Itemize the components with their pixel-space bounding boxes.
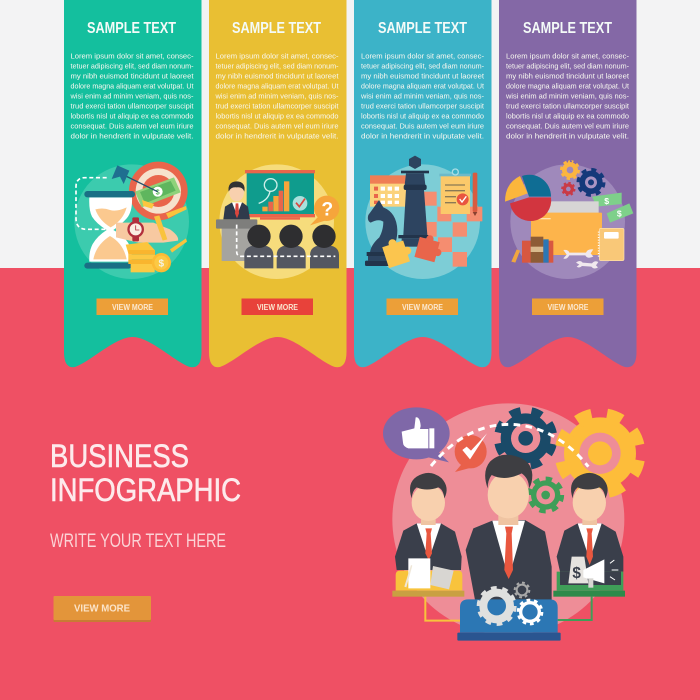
button: view more main: VIEW MORE (74, 604, 130, 614)
text block: dolore magna aliquam erat volutpat. Ut (70, 82, 194, 90)
text block: consequat. Duis autem vel eum iriure (70, 122, 194, 130)
subtitle: WRITE YOUR TEXT HERE (50, 531, 226, 552)
text block: dolor in hendrerit in vulputate velit. (70, 132, 194, 140)
icon: thumbs up bubble (383, 407, 450, 462)
text block: Lorem ipsum dolor sit amet, consec- (361, 52, 484, 60)
text block (70, 52, 194, 140)
text block: dolore magna aliquam erat volutpat. Ut (506, 82, 630, 90)
icon: hourglass, target and coins: $ (156, 187, 160, 196)
text block: tetuer adipiscing elit, sed diam nonum- (361, 62, 484, 70)
icon: chess pieces, calendar and puzzle (365, 156, 482, 279)
text block: wisi enim ad minim veniam, quis nos- (215, 92, 339, 100)
panel: green hourglass (64, 0, 202, 367)
text block: Lorem ipsum dolor sit amet, consec- (70, 52, 194, 60)
icon: pie chart, gears, folder and tools: $ (617, 208, 622, 218)
icon: yellow gear (556, 409, 644, 498)
icon: hourglass, target and coins (74, 162, 189, 279)
text block: dolore magna aliquam erat volutpat. Ut (361, 82, 485, 90)
text block: consequat. Duis autem vel eum iriure (361, 122, 484, 130)
text block: dolor in hendrerit in vulputate velit. (506, 132, 629, 140)
text block: Lorem ipsum dolor sit amet, consec- (506, 52, 629, 60)
text block: tetuer adipiscing elit, sed diam nonum- (216, 62, 339, 70)
heading: sample text: SAMPLE TEXT (378, 20, 467, 37)
text block: tetuer adipiscing elit, sed diam nonum- (506, 62, 629, 70)
text block: my nibh euismod tincidunt ut laoreet (70, 72, 194, 80)
text block: dolore magna aliquam erat volutpat. Ut (216, 82, 339, 90)
figure: left colleague (392, 473, 464, 597)
text block: wisi enim ad minim veniam, quis nos- (70, 92, 194, 100)
heading: sample text: SAMPLE TEXT (87, 20, 176, 37)
text block: lobortis nisl ut aliquip ex ea commodo (506, 112, 629, 120)
panel: blue strategy (354, 0, 492, 367)
panel: purple reports (499, 0, 636, 367)
text block (505, 52, 630, 140)
icon: blue desk with gears (457, 583, 561, 641)
text block (360, 52, 485, 140)
figure: right colleague (553, 473, 625, 597)
icon: presenter, board and audience: ? (321, 200, 333, 221)
text block: consequat. Duis autem vel eum iriure (506, 122, 629, 130)
text block: dolor in hendrerit in vulputate velit. (361, 132, 484, 140)
button: view more: VIEW MORE (257, 303, 299, 312)
figure: center manager (466, 455, 552, 600)
title: BUSINESS (50, 438, 189, 474)
text block: my nibh euismod tincidunt ut laoreet (216, 72, 339, 80)
text block: lobortis nisl ut aliquip ex ea commodo (361, 112, 484, 120)
backdrop circle (392, 403, 624, 635)
text block (215, 52, 339, 140)
button: view more: VIEW MORE (402, 303, 444, 312)
figure: right colleague: $ (572, 565, 581, 582)
icon: navy gear (494, 407, 557, 470)
text block: tetuer adipiscing elit, sed diam nonum- (70, 62, 194, 70)
icon: pie chart, gears, folder and tools (505, 162, 633, 279)
text block: my nibh euismod tincidunt ut laoreet (361, 72, 485, 80)
text block: wisi enim ad minim veniam, quis nos- (505, 92, 629, 100)
button: view more: VIEW MORE (112, 303, 154, 312)
heading: sample text: SAMPLE TEXT (232, 20, 321, 37)
text block: dolor in hendrerit in vulputate velit. (216, 132, 338, 140)
icon: pie chart, gears, folder and tools: $ (604, 196, 609, 206)
illustration: business team (383, 403, 644, 641)
icon: check bubble (455, 433, 487, 472)
button: view more main (54, 596, 151, 622)
text block: wisi enim ad minim veniam, quis nos- (360, 92, 484, 100)
text block: lobortis nisl ut aliquip ex ea commodo (216, 112, 338, 120)
button: view more (242, 298, 313, 315)
text block: my nibh euismod tincidunt ut laoreet (506, 72, 630, 80)
button: view more: VIEW MORE (548, 303, 589, 312)
text block: trud exerci tation ullamcorper suscipit (506, 102, 630, 110)
button: view more (532, 298, 604, 315)
text block: lobortis nisl ut aliquip ex ea commodo (70, 112, 194, 120)
title: INFOGRAPHIC (50, 472, 241, 508)
button: view more (386, 298, 458, 315)
text block: Lorem ipsum dolor sit amet, consec- (216, 52, 339, 60)
text block: trud exerci tation ullamcorper suscipit (216, 102, 339, 110)
icon: presenter, board and audience (216, 164, 339, 279)
button: view more (96, 298, 168, 315)
panel: yellow presentation (209, 0, 346, 367)
text block: consequat. Duis autem vel eum iriure (216, 122, 338, 130)
heading: sample text: SAMPLE TEXT (523, 20, 612, 37)
text block: trud exerci tation ullamcorper suscipit (361, 102, 485, 110)
title (50, 438, 241, 508)
icon: hourglass, target and coins: $ (159, 258, 165, 269)
text block: trud exerci tation ullamcorper suscipit (70, 102, 194, 110)
icon: green gear (530, 479, 561, 511)
connector lines (425, 597, 592, 621)
